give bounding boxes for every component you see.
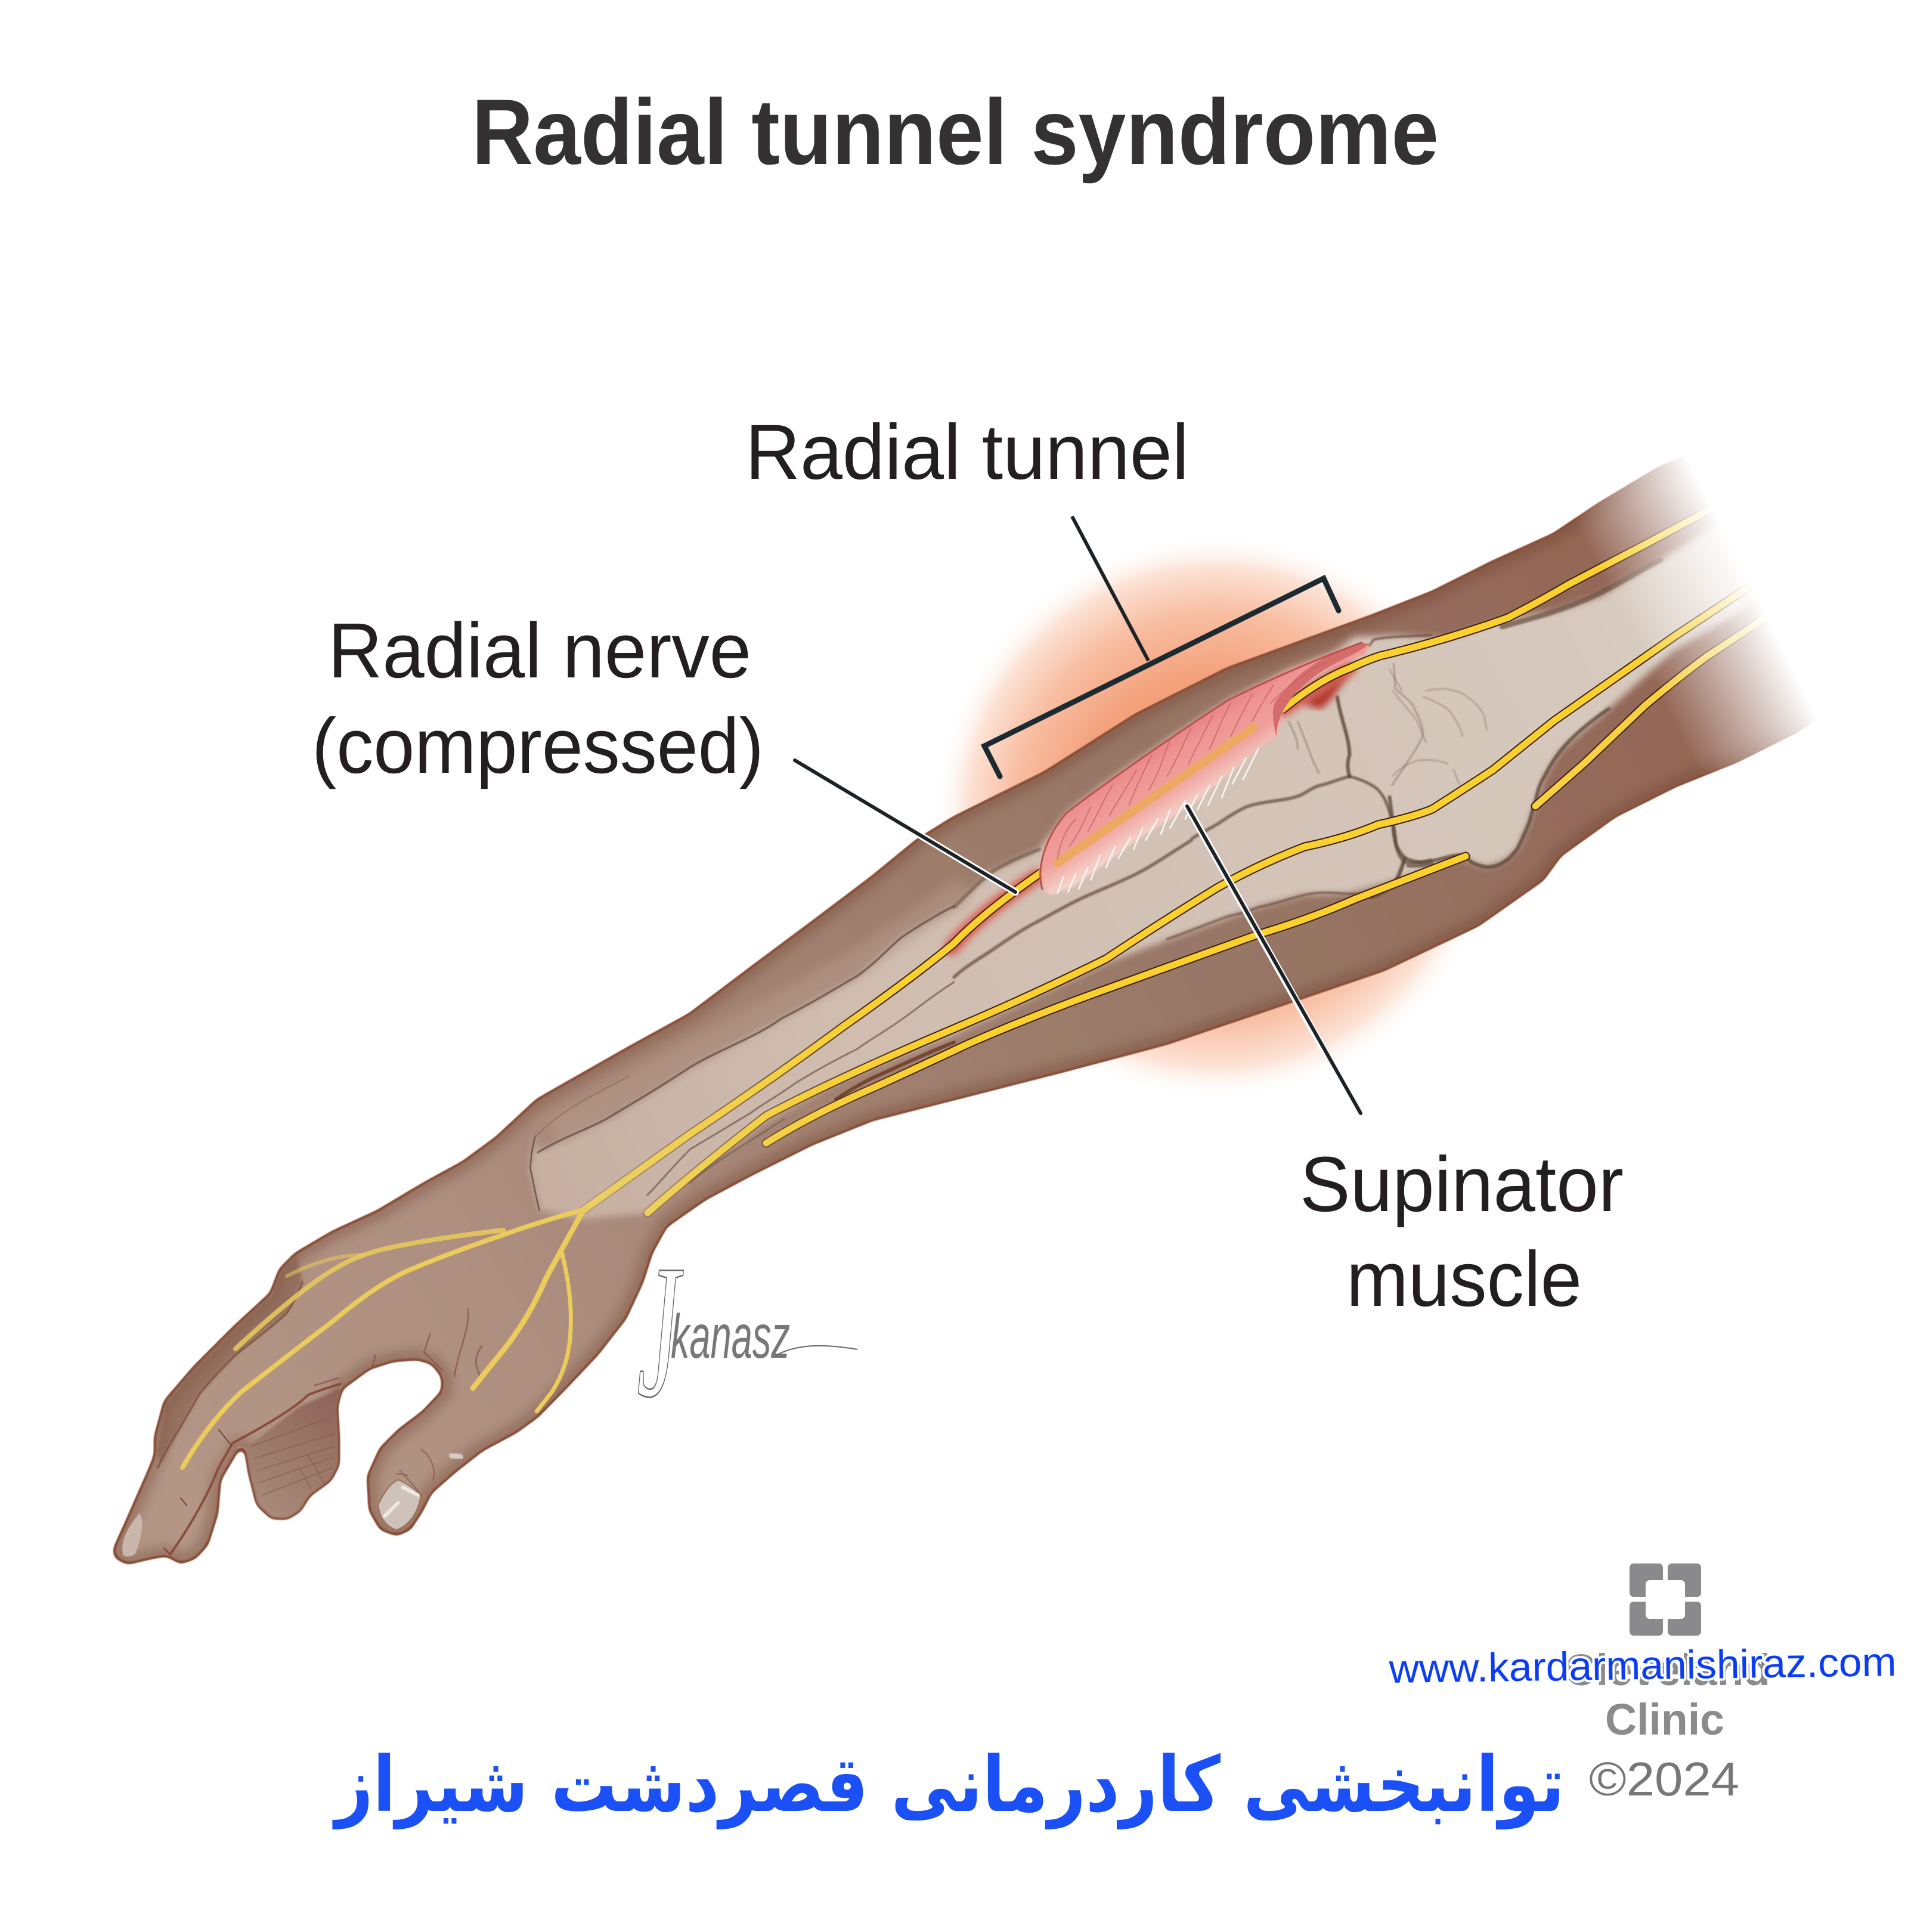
label: supinator muscle xyxy=(1300,1140,1624,1323)
palm creases xyxy=(315,1309,482,1385)
bracket: radial tunnel xyxy=(984,578,1339,776)
back of hand dark line xyxy=(158,1282,302,1467)
folded middle finger xyxy=(246,1388,340,1518)
middle finger creases xyxy=(250,1419,334,1495)
lower tendon line xyxy=(648,982,954,1195)
upper tendon line xyxy=(538,906,954,1153)
signature swoosh xyxy=(775,1346,857,1356)
red tissue under muscle xyxy=(1303,674,1349,710)
nerve through muscle xyxy=(1057,727,1254,863)
joint top line xyxy=(1369,635,1431,646)
upper gray line xyxy=(954,849,1039,907)
illustration: arm xyxy=(115,417,1878,1562)
leader line: supinator xyxy=(1187,806,1361,1113)
arm outline xyxy=(115,417,1878,1562)
thumb knuckle highlight xyxy=(450,1454,462,1459)
label: supinator muscle: Supinator xyxy=(1300,1140,1624,1228)
wrist line xyxy=(530,1137,540,1210)
supinator muscle xyxy=(1039,643,1369,895)
radius long line xyxy=(954,776,1349,977)
title: Radial tunnel syndrome xyxy=(472,80,1439,184)
muscle body xyxy=(1039,643,1369,895)
bone lines: elbow xyxy=(954,635,1431,977)
nerve 1 lower xyxy=(584,873,1040,1210)
nerves xyxy=(182,480,1807,1467)
muscle edge and sheath xyxy=(1040,643,1369,893)
website overlay: www.kardarmanishiraz.com xyxy=(1388,1639,1897,1692)
faint epicondyle contours xyxy=(1390,669,1487,785)
hand shading and lines xyxy=(122,1255,482,1556)
label: radial tunnel: Radial tunnel xyxy=(745,408,1189,496)
nerve 3 lower xyxy=(766,856,1466,1143)
thumb nail highlight xyxy=(385,1487,418,1516)
faint bone lumps xyxy=(1288,664,1423,785)
label: radial nerve compressed: (compressed) xyxy=(312,702,764,789)
dark fibres xyxy=(1057,661,1328,859)
thumb nail xyxy=(379,1480,421,1530)
index finger edge xyxy=(170,1384,340,1555)
thumb knuckle wrinkles xyxy=(397,1450,434,1495)
signature xyxy=(637,1226,857,1437)
dissected forearm window xyxy=(530,477,1848,1219)
hand nerve branches xyxy=(182,1209,587,1467)
arm skin xyxy=(116,478,1779,1562)
label: radial nerve compressed xyxy=(312,606,764,789)
arm inner shading xyxy=(116,493,1751,1562)
clinic name: Clinic xyxy=(1605,1695,1724,1744)
lump outline xyxy=(1390,709,1609,867)
muscle upper edge xyxy=(1040,643,1362,889)
persian overlay: توانبخشی کاردرمانی قصردشت شیراز xyxy=(332,1741,1565,1829)
label: supinator muscle: muscle xyxy=(1346,1235,1582,1323)
white fibres xyxy=(1057,749,1258,893)
shadow between nerves xyxy=(836,1042,954,1099)
lower radius line xyxy=(1167,862,1404,939)
leader line: radial nerve xyxy=(795,760,1015,892)
shadow under nerve xyxy=(1502,560,1661,627)
nerve compression glow xyxy=(951,668,1349,948)
lower joint line xyxy=(1371,858,1432,897)
index nail xyxy=(122,1513,142,1556)
label: radial nerve compressed: Radial nerve xyxy=(328,606,751,694)
finger tip separation xyxy=(164,1429,231,1555)
signature name: kanasz xyxy=(671,1302,790,1371)
nerve 3 upper xyxy=(1535,590,1807,806)
faint tendon shadows xyxy=(675,1119,784,1192)
nerve 1 upper xyxy=(1283,480,1765,710)
joint line xyxy=(1349,776,1431,863)
signature initial: J xyxy=(637,1226,684,1437)
bone lines: epicondyle xyxy=(1371,560,1661,897)
upper forearm lighter band xyxy=(555,888,966,1133)
nerve 2 xyxy=(648,561,1789,1213)
sheath fold xyxy=(1273,643,1369,737)
faint upper line xyxy=(535,1076,629,1137)
back of hand dark band xyxy=(156,1255,302,1462)
radius head edge xyxy=(1337,697,1349,776)
forearm tendon lines xyxy=(530,906,954,1210)
clinic name xyxy=(1565,1645,1770,1744)
clinic name: Cleveland xyxy=(1565,1645,1770,1695)
inflammation glow xyxy=(933,534,1500,1100)
copyright: ©2024 xyxy=(1589,1753,1739,1806)
icon: clinic logo xyxy=(1630,1563,1701,1636)
leader line: radial tunnel xyxy=(1072,516,1148,661)
